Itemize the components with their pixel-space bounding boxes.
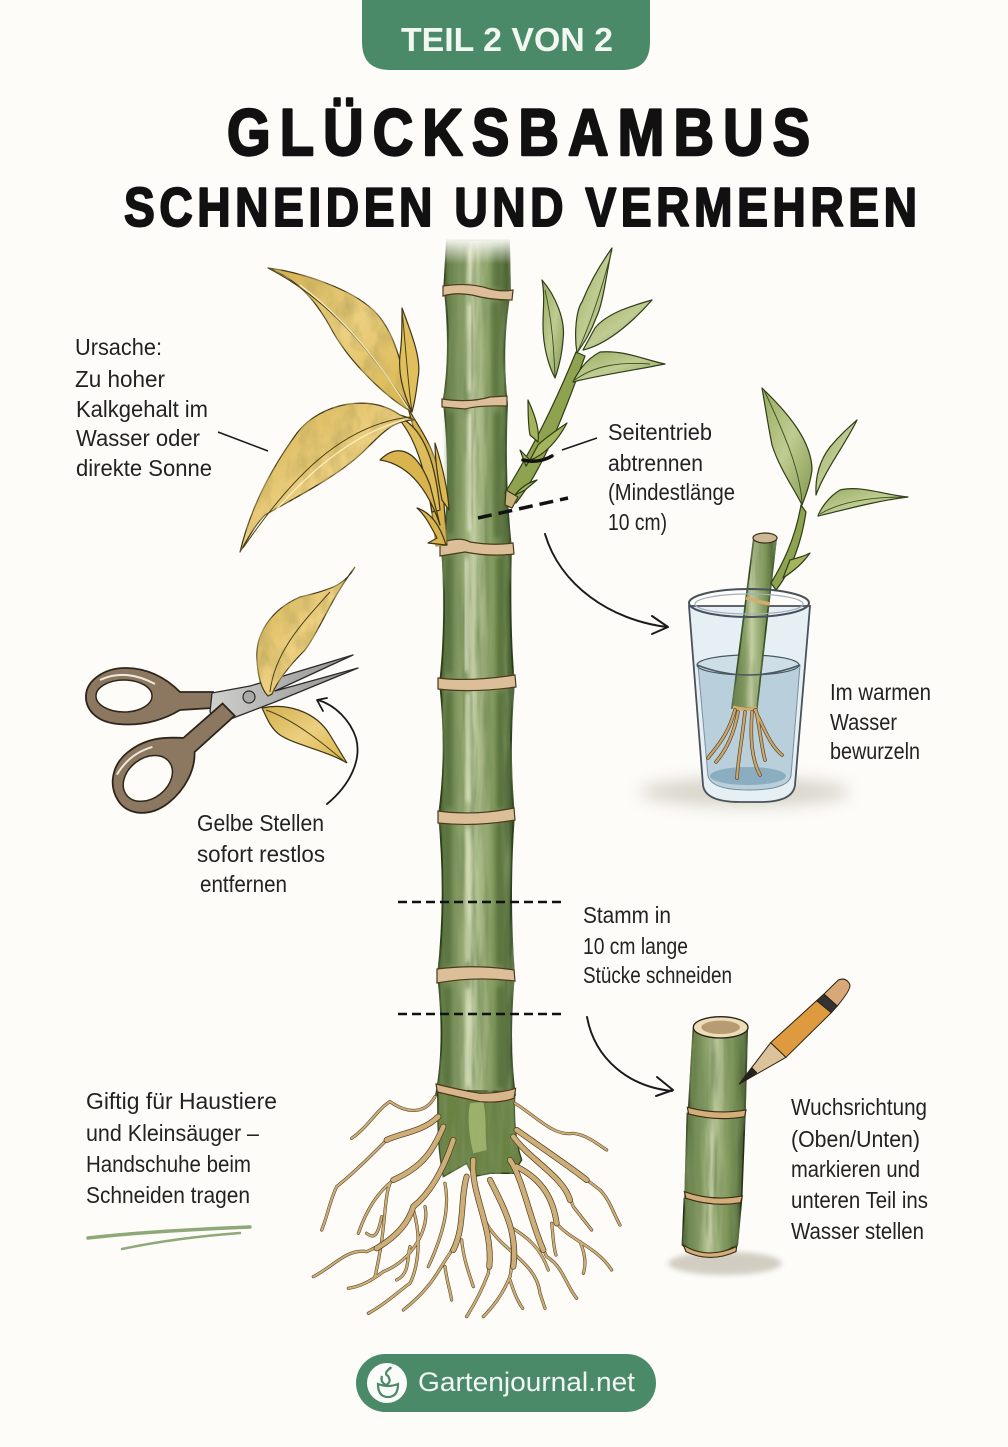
text: toxicity warning [86,1088,277,1208]
text: yellow spots: sofort restlos [197,841,325,867]
root flare [438,1090,522,1177]
cutting roots [708,710,782,778]
cut stem section with pencil [668,979,850,1275]
ground shadow [668,1252,782,1275]
green leaf: left [542,280,563,378]
bamboo stem [436,240,515,1095]
text: side shoot: 10 cm) [608,509,667,535]
water front line [697,665,800,675]
green leaf: right lower [573,352,665,382]
arrow: scissors label to leaf [317,698,358,804]
pencil [739,979,850,1084]
cut marks on side shoot [478,456,568,518]
text: growth direction: unteren Teil ins [791,1187,928,1213]
stem highlights and shadows [448,250,500,1085]
scissors: blades [210,655,358,723]
leader line: side shoot label [562,438,597,450]
cut end [693,1017,748,1038]
text: growth direction: Wasser stellen [791,1218,924,1244]
stem piece [682,1028,747,1254]
yellow leaf: narrow [400,308,419,412]
badge: part 2 of 2 [362,0,650,70]
text: growth direction [791,1094,928,1244]
stem nodes [437,285,516,983]
title: SCHNEIDEN UND VERMEHREN [124,176,917,238]
green side shoot with leaves [505,248,665,508]
yellow shoot stem [408,408,447,546]
water [698,665,800,790]
text: warm water [830,679,931,764]
text: growth direction: markieren und [791,1156,920,1182]
rooting glass with cutting [640,388,908,807]
text: side shoot: Seitentrieb [608,419,712,445]
green shoot stem [505,352,585,503]
green leaf: top [576,248,612,353]
ground shadow [640,777,850,807]
yellow leaf: cut lower [262,706,347,763]
glass body [689,606,810,802]
yellow leaf: large lower [240,403,415,552]
fade at top of stem [438,238,518,264]
text: toxicity warning: Schneiden tragen [86,1182,250,1208]
text: cut stem [583,902,732,988]
cutting shoot and leaves [762,388,908,590]
scissors: lower handle [98,687,252,826]
scissors: upper handle [86,668,213,724]
small shoot leaves [528,400,538,442]
yellow bud at base [417,508,446,545]
text: yellow spots: Gelbe Stellen [197,810,324,836]
text: warm water: Im warmen [830,679,931,705]
text: cut stem: Stücke schneiden [583,962,732,988]
arrow: side shoot to glass [545,534,668,634]
leader line: cause label [218,432,268,451]
text: cause: Kalkgehalt im [76,396,208,422]
footer badge: Gartenjournal.net: Gartenjournal.net [418,1367,636,1397]
scissors: pivot [243,691,255,703]
text: warm water: bewurzeln [830,738,920,764]
text: cut stem: 10 cm lange [583,933,688,959]
green leaf: right upper [583,300,652,350]
text: toxicity warning: Giftig für Haustiere [86,1088,277,1114]
text: toxicity warning: Handschuhe beim [86,1151,251,1177]
text: side shoot: abtrennen [608,450,703,476]
cutting stem in glass [732,537,776,708]
text: yellow spots [197,810,325,897]
text: cause: Zu hoher [75,366,165,392]
text: growth direction: (Oben/Unten) [791,1126,920,1152]
badge: part 2 of 2: TEIL 2 VON 2 [401,21,613,58]
yellow side shoot with leaves [240,268,449,552]
text: cause: Ursache: [75,334,162,360]
yellow leaf: cut upper [257,567,355,696]
footer badge: Gartenjournal.net [356,1354,656,1412]
text: cut stem: Stamm in [583,902,671,928]
base node [436,1084,516,1102]
glass rim [689,589,809,617]
text: toxicity warning: und Kleinsäuger – [86,1120,259,1146]
text: growth direction: Wuchsrichtung [791,1094,927,1120]
yellow leaf: small curled [380,451,440,525]
dashed cut lines on stem [398,902,561,1014]
title [124,96,917,238]
roots of the main stem [313,1084,620,1317]
stem piece nodes [683,1107,746,1257]
text: warm water: Wasser [830,709,897,735]
green brush underline [88,1227,250,1249]
yellow leaf: upper [268,268,412,412]
text: cause: Wasser oder [76,425,200,451]
text: side shoot: (Mindestlänge [608,479,735,505]
arrow: stem to cut piece [587,1017,673,1096]
footer logo [367,1363,407,1403]
root strands [313,1097,620,1317]
text: cause [75,334,212,481]
green shoot base [505,490,518,508]
text: yellow spots: entfernen [200,871,287,897]
text: side shoot [608,419,735,535]
text: cause: direkte Sonne [76,455,212,481]
scissors [86,567,358,826]
title: GLÜCKSBAMBUS [227,96,810,169]
